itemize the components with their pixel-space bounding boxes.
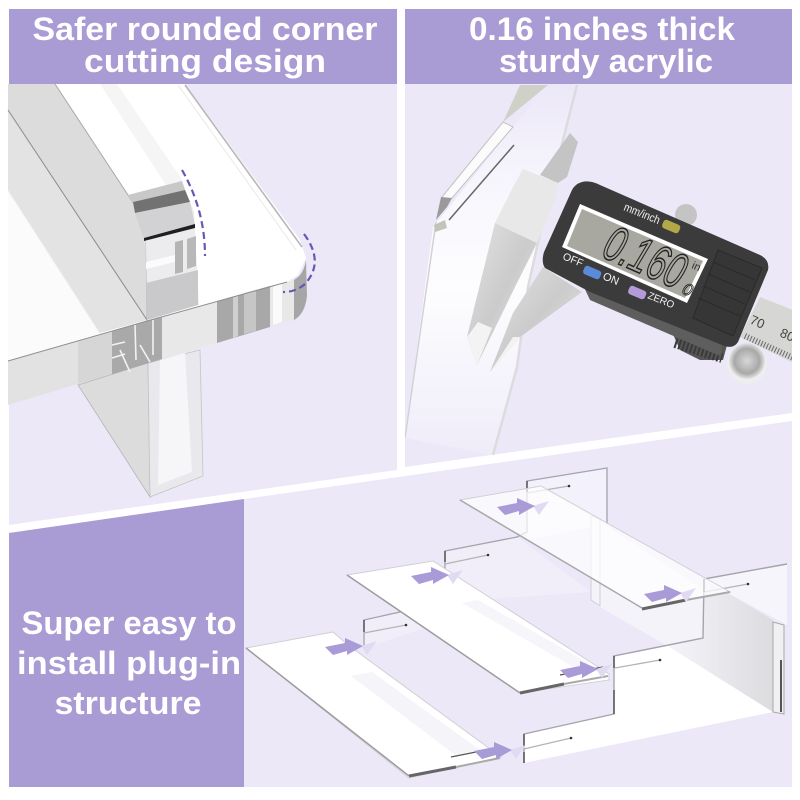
caliper labels and buttons: OFF [561,251,585,270]
heading: installation: install plug-in [17,645,241,681]
arrow 2 [474,742,526,759]
arrow 4 [560,661,612,678]
caliper LCD: in [690,260,702,274]
caliper labels and buttons: ZERO [646,291,676,311]
heading: rounded corner: Safer rounded corner [32,11,378,47]
heading: installation: Super easy to [22,605,236,641]
caliper labels and buttons: mm/inch [622,202,662,227]
heading: rounded corner: cutting design [84,43,326,79]
caliper ruler: 80 [778,325,797,345]
caliper lower lip [583,285,723,356]
heading: installation: structure [54,685,202,721]
caliper ruler [740,297,792,362]
caliper LCD: 0 [679,279,696,301]
shelf front face [8,260,307,405]
heading: thickness: 0.16 inches thick [469,11,735,47]
heading: thickness [405,9,792,84]
arrow 3 [411,567,463,584]
arrow 6 [644,585,696,602]
caliper jaws [467,133,582,372]
caliper knob [675,204,697,226]
acrylic leg [78,350,203,497]
back rail [8,84,147,333]
front shelf [246,632,501,778]
arrow 1 [325,638,377,655]
caliper LCD: 0.160 [595,215,695,300]
illustration: exploded three-tier riser [246,468,787,778]
arrow 5 [497,498,549,515]
back panels [364,468,704,648]
base and side wall [364,468,787,763]
heading: thickness: sturdy acrylic [499,43,713,79]
illustration: acrylic sheet measured by caliper [405,85,800,455]
caliper gear [674,336,727,363]
caliper thumb wheel [727,343,767,384]
caliper body [543,181,768,347]
caliper labels and buttons: ON [601,271,621,288]
panel: rounded corner background [9,84,397,525]
illustration: acrylic shelf corner [8,84,315,497]
caliper grip [693,250,762,336]
sheet top edge [434,85,548,232]
acrylic sheet [410,145,560,416]
dashed corner arcs [182,170,315,292]
notch edges [364,481,704,763]
caliper labels and buttons [561,202,681,311]
caliper LCD [562,204,708,303]
top shelf [460,486,730,609]
heading: installation [9,499,244,787]
panel: installation background [244,421,792,787]
caliper ruler: 70 [748,312,767,332]
shelf top surface [8,84,306,361]
slots [364,485,749,749]
heading: rounded corner [9,9,397,84]
middle shelf [347,561,609,693]
rail end face [128,181,199,320]
panel: thickness background [405,84,792,467]
